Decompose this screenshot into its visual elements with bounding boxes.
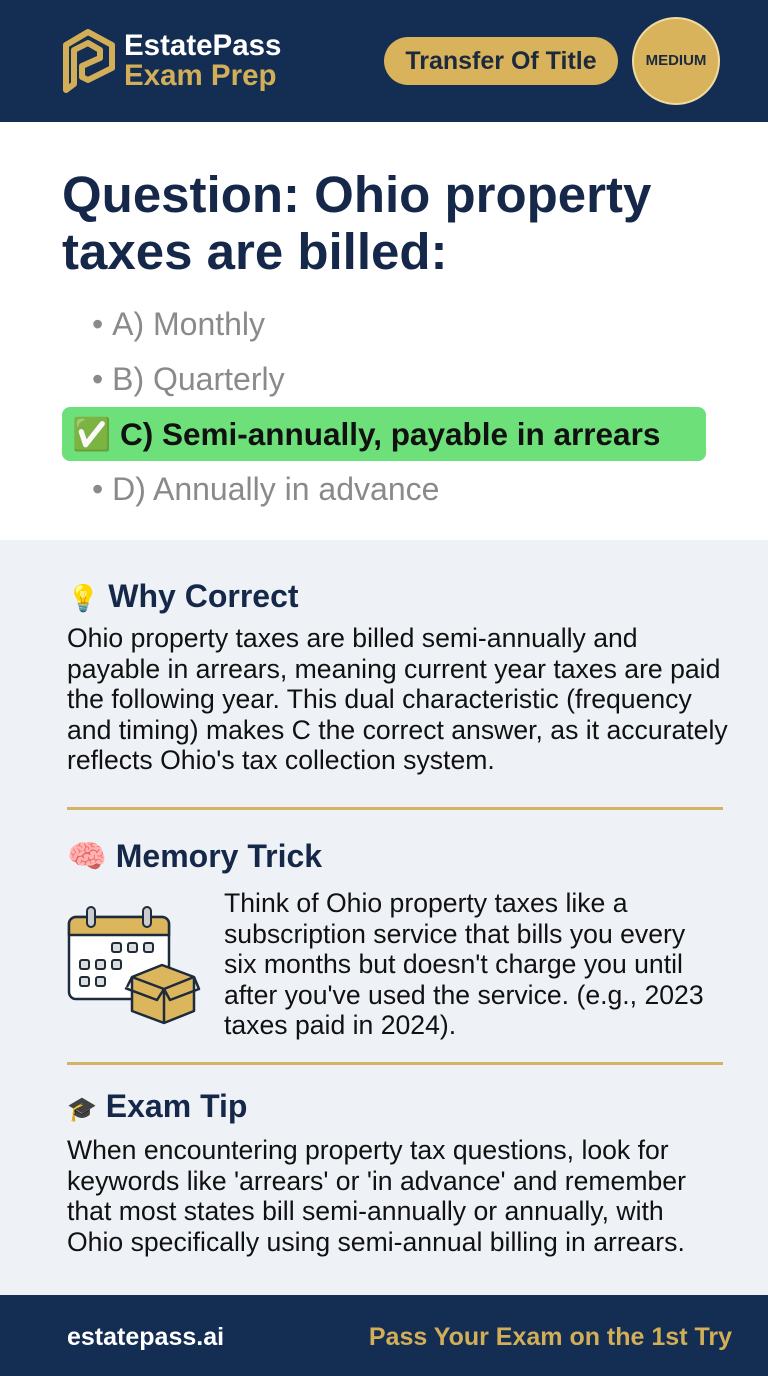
text: after you've used the service. (e.g., 2023 xyxy=(224,980,704,1010)
text: subscription service that bills you every xyxy=(224,918,685,948)
question title xyxy=(62,166,652,280)
logo text: Exam Prep xyxy=(124,59,276,92)
text: the following year. This dual characteristic (frequency xyxy=(67,684,692,714)
topic pill xyxy=(384,37,618,85)
logo icon xyxy=(63,29,115,93)
option A: • A) Monthly xyxy=(92,306,265,342)
option C correct xyxy=(62,407,706,461)
section: exam tip xyxy=(67,1088,686,1256)
option D: • D) Annually in advance xyxy=(92,471,439,507)
text: reflects Ohio's tax collection system. xyxy=(67,745,495,775)
text xyxy=(224,888,704,1040)
question title: Question: Ohio property xyxy=(62,166,651,223)
logo text xyxy=(124,29,281,92)
text: six months but doesn't charge you until xyxy=(224,949,683,979)
text: that most states bill semi-annually or annually, with xyxy=(67,1196,664,1226)
site: estatepass.ai xyxy=(67,1323,224,1351)
text: taxes paid in 2024). xyxy=(224,1010,456,1040)
logo text: EstatePass xyxy=(124,29,281,62)
section: why correct xyxy=(67,578,728,775)
text: and timing) makes C the correct answer, as it accurately xyxy=(67,714,728,744)
option B: • B) Quarterly xyxy=(92,361,285,397)
text: Ohio specifically using semi-annual billing in arrears. xyxy=(67,1226,685,1256)
text xyxy=(67,1135,686,1256)
difficulty badge xyxy=(632,17,720,105)
text xyxy=(67,623,728,775)
question title: taxes are billed: xyxy=(62,223,448,280)
text: keywords like 'arrears' or 'in advance' and remember xyxy=(67,1166,686,1196)
question panel xyxy=(0,122,768,540)
section: memory trick xyxy=(67,838,704,1040)
text: Think of Ohio property taxes like a xyxy=(224,888,628,918)
heading: 🧠 Memory Trick xyxy=(67,838,322,874)
footer xyxy=(0,1295,768,1376)
tagline: Pass Your Exam on the 1st Try xyxy=(369,1323,732,1351)
option C correct: ✅ C) Semi-annually, payable in arrears xyxy=(72,416,660,452)
text: When encountering property tax questions, look for xyxy=(67,1135,669,1165)
topic pill: Transfer Of Title xyxy=(405,47,597,75)
header xyxy=(0,0,768,122)
icon: calendar and box xyxy=(68,906,200,1024)
text: payable in arrears, meaning current year taxes are paid xyxy=(67,654,720,684)
heading: 💡 Why Correct xyxy=(67,578,299,614)
text: Ohio property taxes are billed semi-annually and xyxy=(67,623,638,653)
heading: 🎓 Exam Tip xyxy=(67,1088,247,1124)
difficulty badge: MEDIUM xyxy=(646,52,706,69)
